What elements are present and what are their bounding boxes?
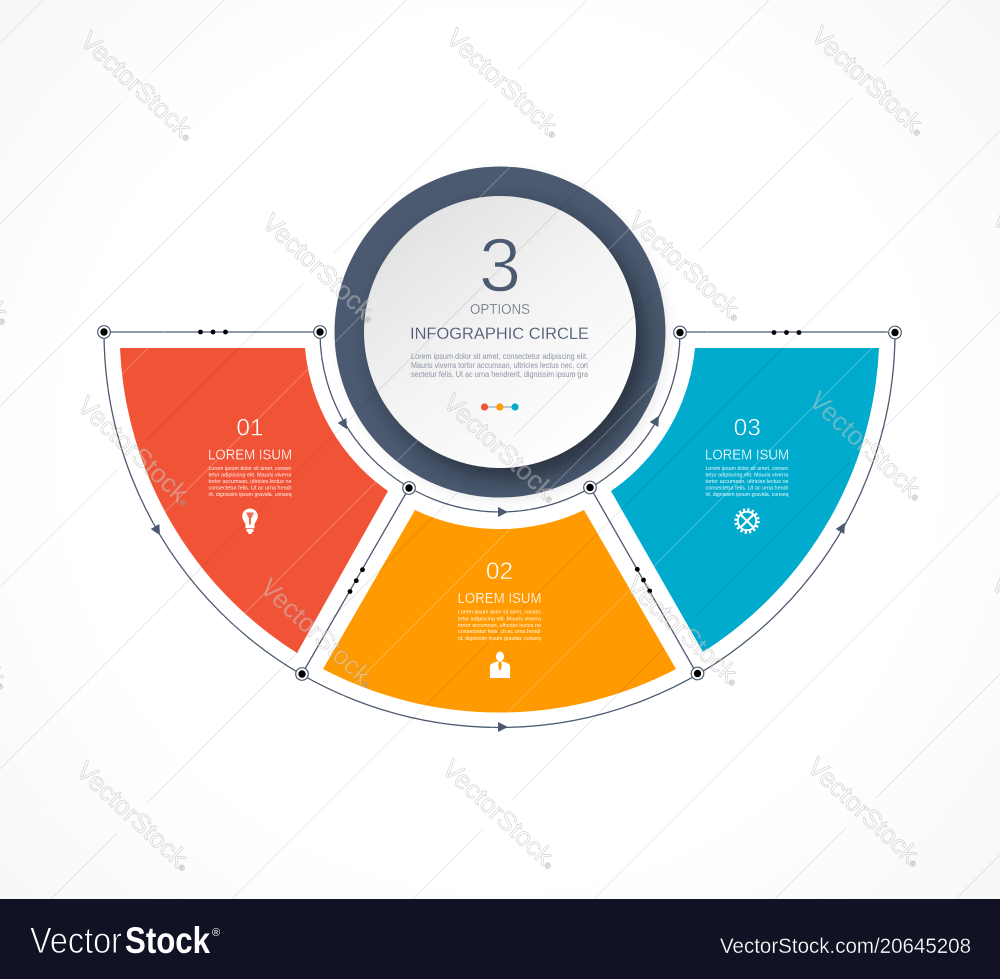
- footer logo: ®: [212, 927, 220, 939]
- body text 02: consectetur felis. Ut ac urna hendr: [458, 629, 541, 635]
- watermarks: VectorStock: [70, 755, 192, 872]
- body text 01: consectetur felis. Ut ac urna hendr: [208, 486, 292, 492]
- watermarks: ®: [911, 127, 922, 138]
- big number 3: 3: [479, 224, 521, 308]
- watermarks: ®: [180, 132, 191, 143]
- white disc: [364, 196, 636, 468]
- heading 01: LOREM ISUM: [208, 448, 292, 464]
- watermarks: ®: [360, 679, 371, 690]
- watermarks: ®: [177, 497, 188, 508]
- body text 02: tortor accumsan, ultricies lectus ne: [458, 623, 541, 629]
- watermarks: ®: [542, 860, 553, 871]
- central circle: [334, 166, 669, 501]
- footer logo: [30, 920, 220, 961]
- connector small dots: [198, 330, 801, 594]
- number 02: 02: [486, 558, 513, 585]
- circle body text: Lorem ipsum dolor sit amet, consectetur adipiscing elit.: [411, 351, 588, 361]
- panel: orange segment 02: [323, 510, 676, 712]
- circle body text: Mauris viverra tortor accumsan, ultricies lectus nec, con: [411, 360, 588, 370]
- panel: blue segment 03: [611, 348, 879, 652]
- watermarks: ®: [728, 312, 739, 323]
- connector nodes: [98, 326, 901, 680]
- body text 01: tortor accumsan, ultricies lectus ne: [208, 479, 292, 485]
- circle body text: [411, 351, 588, 379]
- watermarks: ®: [907, 858, 918, 869]
- heading 02: LOREM ISUM: [458, 591, 542, 607]
- watermarks: VectorStock: [622, 205, 744, 322]
- body text 03: tortor accumsan, ultricies lectus ne: [706, 479, 788, 485]
- icon: business person: [490, 652, 510, 678]
- body text 03: [706, 466, 789, 498]
- watermarks: VectorStock: [805, 20, 927, 137]
- dark ring: [334, 166, 666, 498]
- body text 02: tetur adipiscing elit. Mauris viverra: [458, 616, 542, 622]
- body text 01: tetur adipiscing elit. Mauris viverra: [208, 473, 292, 479]
- watermarks: ®: [546, 129, 557, 140]
- watermarks: VectorStock: [256, 207, 378, 324]
- options label: OPTIONS: [470, 302, 530, 318]
- watermarks: VectorStock: [71, 390, 193, 507]
- circle body text: sectetur felis. Ut ac urna hendrerit, dignissim ipsum gra: [411, 369, 588, 379]
- body text 02: rit, dignissim ipsum gravida, conseq: [458, 636, 541, 642]
- watermarks: ®: [909, 492, 920, 503]
- watermarks: ®: [543, 494, 554, 505]
- watermarks: VectorStock: [803, 385, 925, 502]
- number 01: 01: [236, 414, 264, 442]
- heading 03: LOREM ISUM: [705, 448, 789, 464]
- connector lines: [104, 332, 895, 728]
- body text 02: [458, 610, 542, 642]
- watermarks: VectorStock: [437, 387, 559, 504]
- watermarks: ®: [176, 862, 187, 873]
- footer bar: [0, 899, 1000, 979]
- disc shadow on ring: [374, 207, 646, 479]
- icon: gear: [736, 510, 758, 532]
- arrows on connector arcs: [151, 413, 849, 732]
- body text 02: Lorem ipsum dolor sit amet, consec: [458, 610, 541, 616]
- body text 03: consectetur felis. Ut ac urna hendr: [706, 486, 789, 492]
- body text 01: Lorem ipsum dolor sit amet, consec: [208, 466, 292, 472]
- body text 03: tetur adipiscing elit. Mauris viverra: [706, 473, 789, 479]
- number 03: 03: [734, 414, 761, 442]
- watermarks: VectorStock: [440, 22, 562, 139]
- body text 03: rit, dignissim ipsum gravida, conseq: [706, 492, 788, 498]
- icon: light bulb: [242, 508, 258, 534]
- footer image id: VectorStock.com/20645208: [720, 935, 971, 958]
- footer logo: Stock: [125, 920, 210, 961]
- watermarks: VectorStock: [436, 753, 558, 870]
- three coloured dots: [481, 403, 519, 411]
- panel: red segment 01: [120, 348, 388, 653]
- watermarks: ®: [362, 314, 373, 325]
- watermarks: ®: [726, 677, 737, 688]
- watermarks: VectorStock: [254, 572, 376, 689]
- circle title: INFOGRAPHIC CIRCLE: [410, 324, 589, 343]
- body text 01: [208, 466, 292, 498]
- watermarks: VectorStock: [620, 570, 742, 687]
- watermarks: VectorStock: [74, 25, 196, 142]
- body text 03: Lorem ipsum dolor sit amet, consec: [706, 466, 789, 472]
- footer logo: Vector: [30, 920, 122, 961]
- body text 01: rit, dignissim ipsum gravida, conseq: [208, 492, 292, 498]
- watermarks: VectorStock: [801, 751, 923, 868]
- ring drop shadow: [339, 171, 669, 501]
